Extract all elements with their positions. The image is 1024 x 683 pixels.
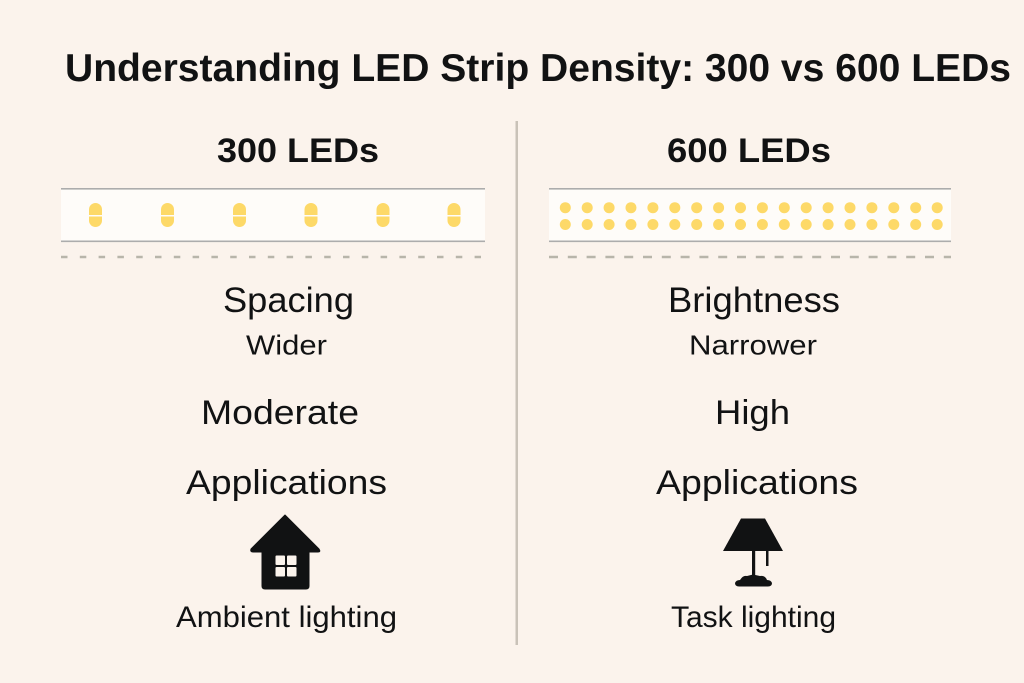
icon: house xyxy=(251,515,320,589)
label: Brightness: Brightness xyxy=(668,281,840,320)
panel: 600 LEDs xyxy=(549,132,951,634)
title: Understanding LED Strip Density: 300 vs 600 LEDs xyxy=(65,47,1011,90)
label: Applications: Applications xyxy=(656,464,858,502)
value: Moderate: Moderate xyxy=(201,394,359,432)
icon: table lamp xyxy=(723,518,783,586)
column divider xyxy=(516,121,518,645)
heading: 600 LEDs: 600 LEDs xyxy=(667,132,831,170)
label: Applications: Applications xyxy=(186,464,387,502)
value: High: High xyxy=(715,394,790,432)
LED strip: 300 xyxy=(61,188,485,242)
value: Wider: Wider xyxy=(246,330,327,360)
LED strip: 600 xyxy=(549,188,951,242)
caption: Ambient lighting: Ambient lighting xyxy=(176,601,397,634)
panel: 300 LEDs xyxy=(61,132,485,634)
label: Spacing: Spacing xyxy=(223,281,354,320)
caption: Task lighting: Task lighting xyxy=(671,601,836,634)
heading: 300 LEDs: 300 LEDs xyxy=(217,132,379,170)
value: Narrower: Narrower xyxy=(689,330,817,360)
